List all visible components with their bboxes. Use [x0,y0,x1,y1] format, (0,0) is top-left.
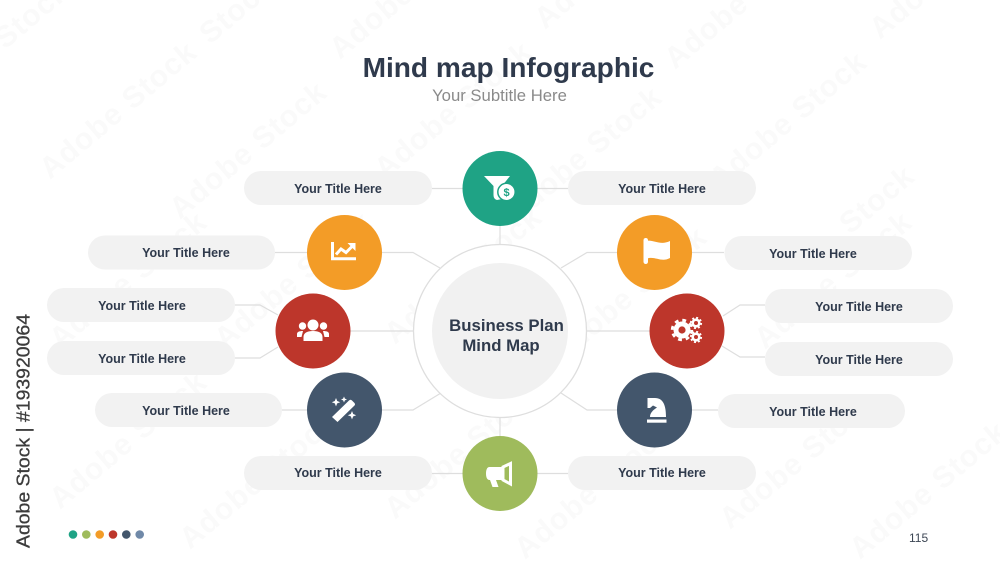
text: Adobe Stock [33,35,203,185]
icon: funnel with dollar on teal circle [462,151,538,226]
label pill: middle left 1 [47,288,235,322]
text: Stock [833,159,921,240]
icon: funnel with dollar on teal circle: $ [503,187,510,199]
icon: megaphone on green circle [462,436,538,511]
icon: chess knight on navy circle [617,372,692,448]
text: Adobe Stock [43,205,213,355]
text: Adobe Stock [703,45,873,195]
text: Adobe Stock [498,80,668,230]
label pill: bottom left: Your Title Here [294,466,382,480]
icon: team on red circle [276,294,350,368]
label pill: top right: Your Title Here [618,182,706,196]
icon: gears on red circle [650,294,724,368]
icon: flag on orange circle [617,215,692,290]
label pill: upper left [88,236,275,270]
vertical stock credit: Adobe Stock | #193920064 [14,314,34,548]
icon: magic wand on navy circle [307,372,382,448]
label pill: upper right: Your Title Here [769,247,857,261]
label pill: bottom right: Your Title Here [618,466,706,480]
text: Adobe Stock [508,415,678,563]
central hub: Business Plan Mind Map [414,244,586,418]
label pill: middle right 1 [765,289,953,323]
label pill: middle right 2: Your Title Here [815,353,903,367]
label pill: lower left: Your Title Here [142,404,230,418]
central hub: Business Plan Mind Map: Business Plan [449,316,564,335]
text: Adobe Stock [368,35,538,185]
page number: 115 [909,531,928,545]
label pill: lower left [95,393,282,427]
label pill: middle right 1: Your Title Here [815,300,903,314]
text: Adobe Stock [748,205,918,355]
text: Adobe Stock [163,75,333,225]
label pill: bottom right [568,456,756,490]
text: Adobe Stock [173,405,343,555]
connector lines [235,188,765,474]
text: Adobe Stock [713,385,883,535]
label pill: bottom left [244,456,432,490]
label pill: middle left 2 [47,341,235,375]
label pill: top left: Your Title Here [294,182,382,196]
label pill: middle left 2: Your Title Here [98,352,186,366]
central hub: Business Plan Mind Map: Mind Map [462,336,540,355]
text: Adobe Stock [208,205,378,355]
text: Adobe Stock [378,375,548,525]
label pill: upper left: Your Title Here [142,246,230,260]
label pill: lower right [718,394,905,428]
icon: growth chart on orange circle [307,215,382,290]
text: Adobe Stock [43,365,213,515]
text: Adobe Stock [378,200,548,350]
title: Mind map Infographic [363,52,654,83]
label pill: middle left 1: Your Title Here [98,299,186,313]
label pill: middle right 2 [765,342,953,376]
footer colour dots [69,530,144,539]
label pill: upper right [724,236,912,270]
subtitle: Your Subtitle Here [432,86,567,105]
label pill: top right [568,171,756,205]
label pill: top left [244,171,432,205]
text: Adobe Stock [543,220,713,370]
label pill: lower right: Your Title Here [769,405,857,419]
